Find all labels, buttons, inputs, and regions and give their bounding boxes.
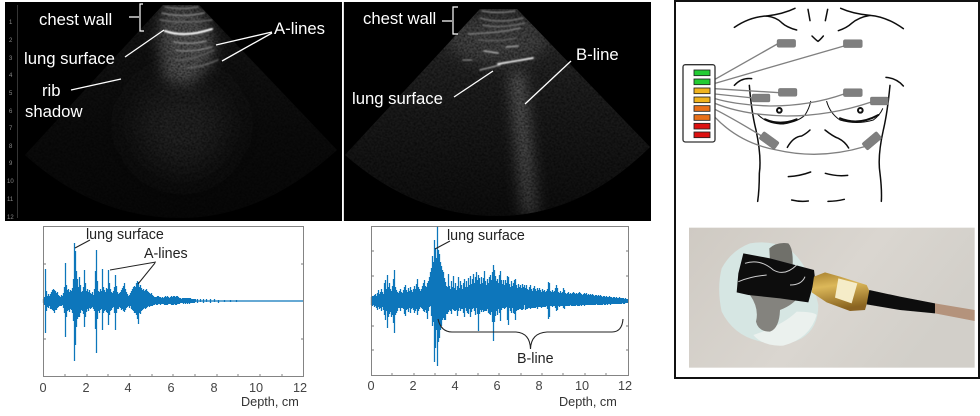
- x axis labels: [367, 379, 632, 393]
- annotation: B-line ultrasound: B-line: [576, 45, 619, 64]
- x axis labels: 6: [167, 381, 175, 395]
- x axis labels: 8: [535, 379, 543, 393]
- depth ruler: 12: [7, 215, 14, 221]
- sensor patches: [752, 39, 888, 151]
- panel: wearable sensor illustration frame: [675, 1, 979, 378]
- depth ruler: [7, 5, 18, 221]
- x axis labels: 4: [451, 379, 459, 393]
- waveform trace A-lines: [43, 243, 303, 361]
- annotation: A-lines ultrasound: A-lines: [274, 19, 325, 38]
- black sensor block: [737, 253, 815, 302]
- lung surface label: [435, 228, 525, 249]
- depth ruler: 8: [9, 144, 13, 150]
- coax cable: [935, 303, 975, 321]
- depth ruler: 2: [9, 38, 13, 44]
- annotation: lung surface right: [352, 71, 493, 108]
- lung surface label: lung surface: [447, 228, 525, 244]
- annotation: rib shadow: rib: [42, 81, 61, 100]
- A-lines label: [110, 246, 188, 284]
- depth ruler: 1: [9, 20, 13, 26]
- x axis labels: 8: [210, 381, 218, 395]
- x axis labels: 10: [249, 381, 263, 395]
- x axis labels: 2: [82, 381, 90, 395]
- depth ruler: 10: [7, 179, 14, 185]
- axes frame: [372, 226, 628, 376]
- annotation: chest wall right: [363, 7, 458, 34]
- depth ruler: 6: [9, 109, 13, 115]
- annotation: B-line ultrasound: [525, 45, 619, 104]
- waveform chart: A-lines: [39, 226, 307, 409]
- x axis labels: [39, 381, 307, 395]
- annotation: rib shadow: shadow: [25, 102, 83, 121]
- sensor cables: [715, 44, 871, 154]
- depth ruler: 3: [9, 56, 13, 62]
- waveform chart: B-line: [367, 226, 632, 409]
- x axis labels: 0: [367, 379, 375, 393]
- B-line brace and label: B-line: [517, 351, 554, 367]
- status indicator module: [683, 65, 715, 142]
- annotation: chest wall left: [39, 4, 144, 31]
- annotation: chest wall right: chest wall: [363, 9, 436, 28]
- gold connector: [812, 272, 870, 311]
- A-lines label: A-lines: [144, 246, 188, 262]
- depth ruler: 4: [9, 73, 13, 79]
- B-line brace and label: [438, 319, 623, 367]
- x axis labels: 12: [293, 381, 307, 395]
- gel patch: [719, 242, 818, 344]
- x axis labels: 10: [575, 379, 589, 393]
- axis title: Depth, cm: [241, 395, 299, 409]
- annotation: chest wall left: chest wall: [39, 10, 112, 29]
- exposed transducer cross: [769, 243, 793, 265]
- depth ruler: 5: [9, 91, 13, 97]
- annotation: A-lines ultrasound: [216, 19, 325, 61]
- waveform trace B-line: [371, 226, 628, 366]
- photo: ultrasound sensor with connector: [689, 228, 975, 368]
- annotation: lung surface left: lung surface: [24, 49, 115, 68]
- x axis labels: 6: [493, 379, 501, 393]
- annotation: lung surface left: [24, 30, 164, 68]
- diagram: torso with sensors: [683, 8, 903, 201]
- axis title: Depth, cm: [559, 395, 617, 409]
- x axis labels: 4: [124, 381, 132, 395]
- torso outline: [734, 8, 903, 201]
- lung surface label: [75, 227, 164, 248]
- x axis labels: 0: [39, 381, 47, 395]
- axes frame: [44, 226, 304, 376]
- depth ruler: 7: [9, 126, 13, 132]
- panel: A-line ultrasound image: [0, 0, 345, 222]
- ultrasound sector: A-lines: [27, 5, 336, 213]
- annotation: lung surface right: lung surface: [352, 89, 443, 108]
- depth ruler: 11: [7, 197, 14, 203]
- ultrasound sector: B-line: [340, 0, 655, 222]
- panel: B-line ultrasound image: [340, 0, 655, 222]
- nipple marks: [777, 108, 782, 113]
- nipple mark right: [858, 108, 863, 113]
- annotation: rib shadow: [25, 79, 121, 121]
- cable sleeve: [867, 290, 935, 313]
- lung surface label: lung surface: [86, 227, 164, 243]
- x axis labels: 2: [409, 379, 417, 393]
- x axis labels: 12: [618, 379, 632, 393]
- depth ruler: 9: [9, 161, 13, 167]
